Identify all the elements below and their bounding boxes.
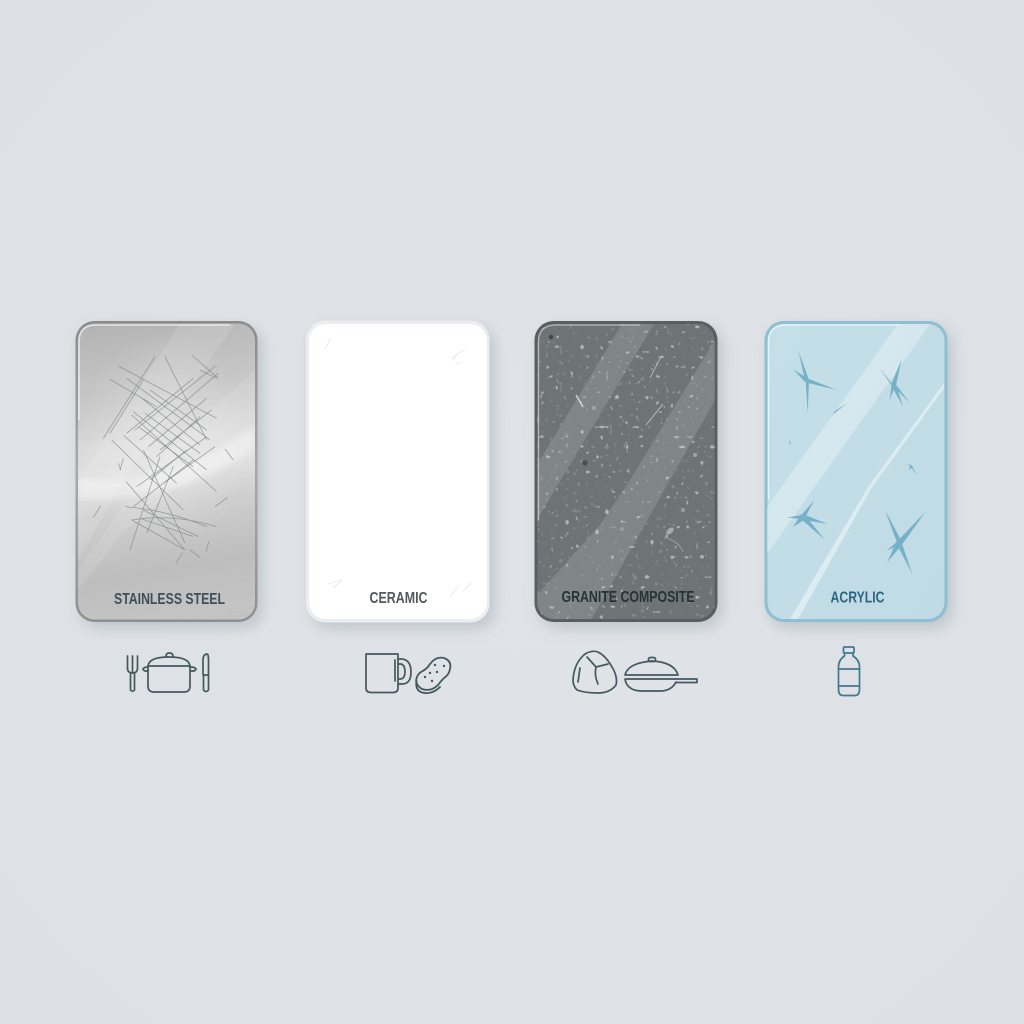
icon: sponge bbox=[416, 658, 450, 693]
panel: ceramic bbox=[306, 320, 490, 622]
panel: acrylic bbox=[764, 321, 948, 622]
panel: stainless steel bbox=[76, 321, 258, 622]
icon: fork bbox=[128, 656, 138, 691]
icon: lidded pan bbox=[625, 658, 697, 691]
cracks bbox=[784, 351, 926, 574]
label: acrylic: ACRYLIC bbox=[830, 590, 884, 606]
card body: brushed steel bbox=[76, 321, 258, 622]
icon: bottle bbox=[838, 647, 860, 696]
top-left highlight bbox=[538, 325, 640, 520]
icon: mug bbox=[366, 654, 411, 692]
panel: granite composite bbox=[534, 321, 718, 622]
faint scratches bbox=[325, 338, 471, 597]
card body: white glaze bbox=[306, 320, 490, 622]
label: granite composite: GRANITE COMPOSITE bbox=[562, 589, 694, 606]
top-left highlight bbox=[768, 325, 900, 500]
brushed texture and reflections bbox=[78, 334, 254, 510]
scratches bbox=[93, 355, 233, 563]
card body: speckled granite bbox=[534, 321, 718, 622]
icon: knife bbox=[203, 654, 208, 692]
icon: rock bbox=[573, 651, 616, 693]
label: ceramic: CERAMIC bbox=[370, 590, 428, 607]
card body: pale blue acrylic bbox=[764, 321, 948, 622]
label: stainless steel: STAINLESS STEEL bbox=[114, 591, 225, 608]
speckles and reflections bbox=[537, 324, 715, 622]
reflections bbox=[767, 324, 944, 619]
top-left highlight bbox=[79, 325, 230, 420]
icon: cooking pot bbox=[143, 653, 196, 692]
